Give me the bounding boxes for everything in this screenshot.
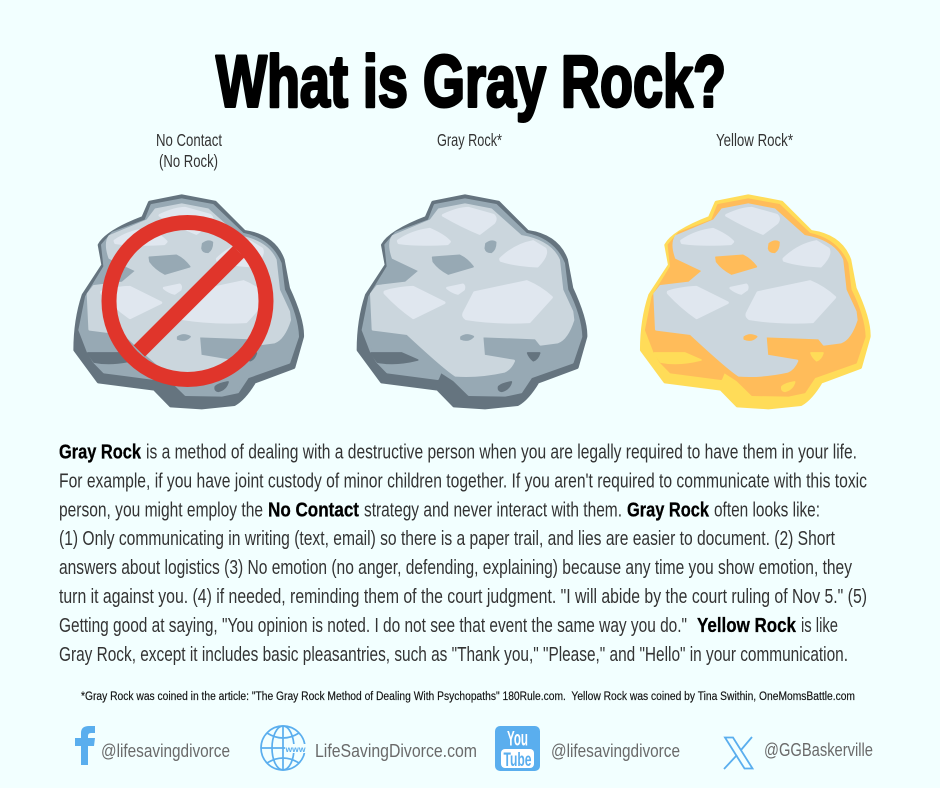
body paragraph: person, you might employ the xyxy=(59,499,263,521)
body paragraph xyxy=(59,442,867,666)
title: What is Gray Rock? xyxy=(216,42,726,122)
icon: X xyxy=(724,737,752,769)
label: yellow rock: Yellow Rock* xyxy=(716,130,793,150)
label: no contact xyxy=(156,130,222,171)
body paragraph: often looks like: xyxy=(714,499,820,521)
body paragraph: strategy and never interact with them. xyxy=(364,499,622,521)
body paragraph: Yellow Rock xyxy=(697,615,797,637)
X handle: @GGBaskerville xyxy=(764,740,873,760)
website address: LifeSavingDivorce.com xyxy=(315,741,477,761)
icon: yellow rock xyxy=(642,196,869,408)
icon: red prohibition sign xyxy=(109,222,266,380)
facebook handle: @lifesavingdivorce xyxy=(101,741,230,761)
icon: globe www: www xyxy=(284,745,306,754)
icon: globe www xyxy=(261,726,306,770)
icon: youtube: Tube xyxy=(504,750,532,771)
body paragraph: is like xyxy=(801,615,838,637)
label: no contact: (No Rock) xyxy=(159,151,218,171)
body paragraph: Getting good at saying, "You opinion is noted. I do not see that event the same way you do." xyxy=(59,615,687,637)
icon: youtube xyxy=(495,726,540,771)
icon: gray rock xyxy=(358,196,586,408)
youtube handle: @lifesavingdivorce xyxy=(551,741,680,761)
footnote: *Gray Rock was coined in the article: "The Gray Rock Method of Dealing With Psychopaths" 180Rule.com. Yellow Rock was coined by Tina Swithin, OneMomsBattle.com xyxy=(81,691,855,703)
icon: facebook xyxy=(75,726,95,765)
label: no contact: No Contact xyxy=(156,130,222,150)
body paragraph: Gray Rock xyxy=(627,499,710,521)
icon: crossed-out gray rock xyxy=(75,196,302,408)
icon: youtube: You xyxy=(507,728,528,750)
body paragraph: Gray Rock xyxy=(59,442,142,464)
label: gray rock: Gray Rock* xyxy=(437,130,502,150)
body paragraph: No Contact xyxy=(268,499,359,521)
